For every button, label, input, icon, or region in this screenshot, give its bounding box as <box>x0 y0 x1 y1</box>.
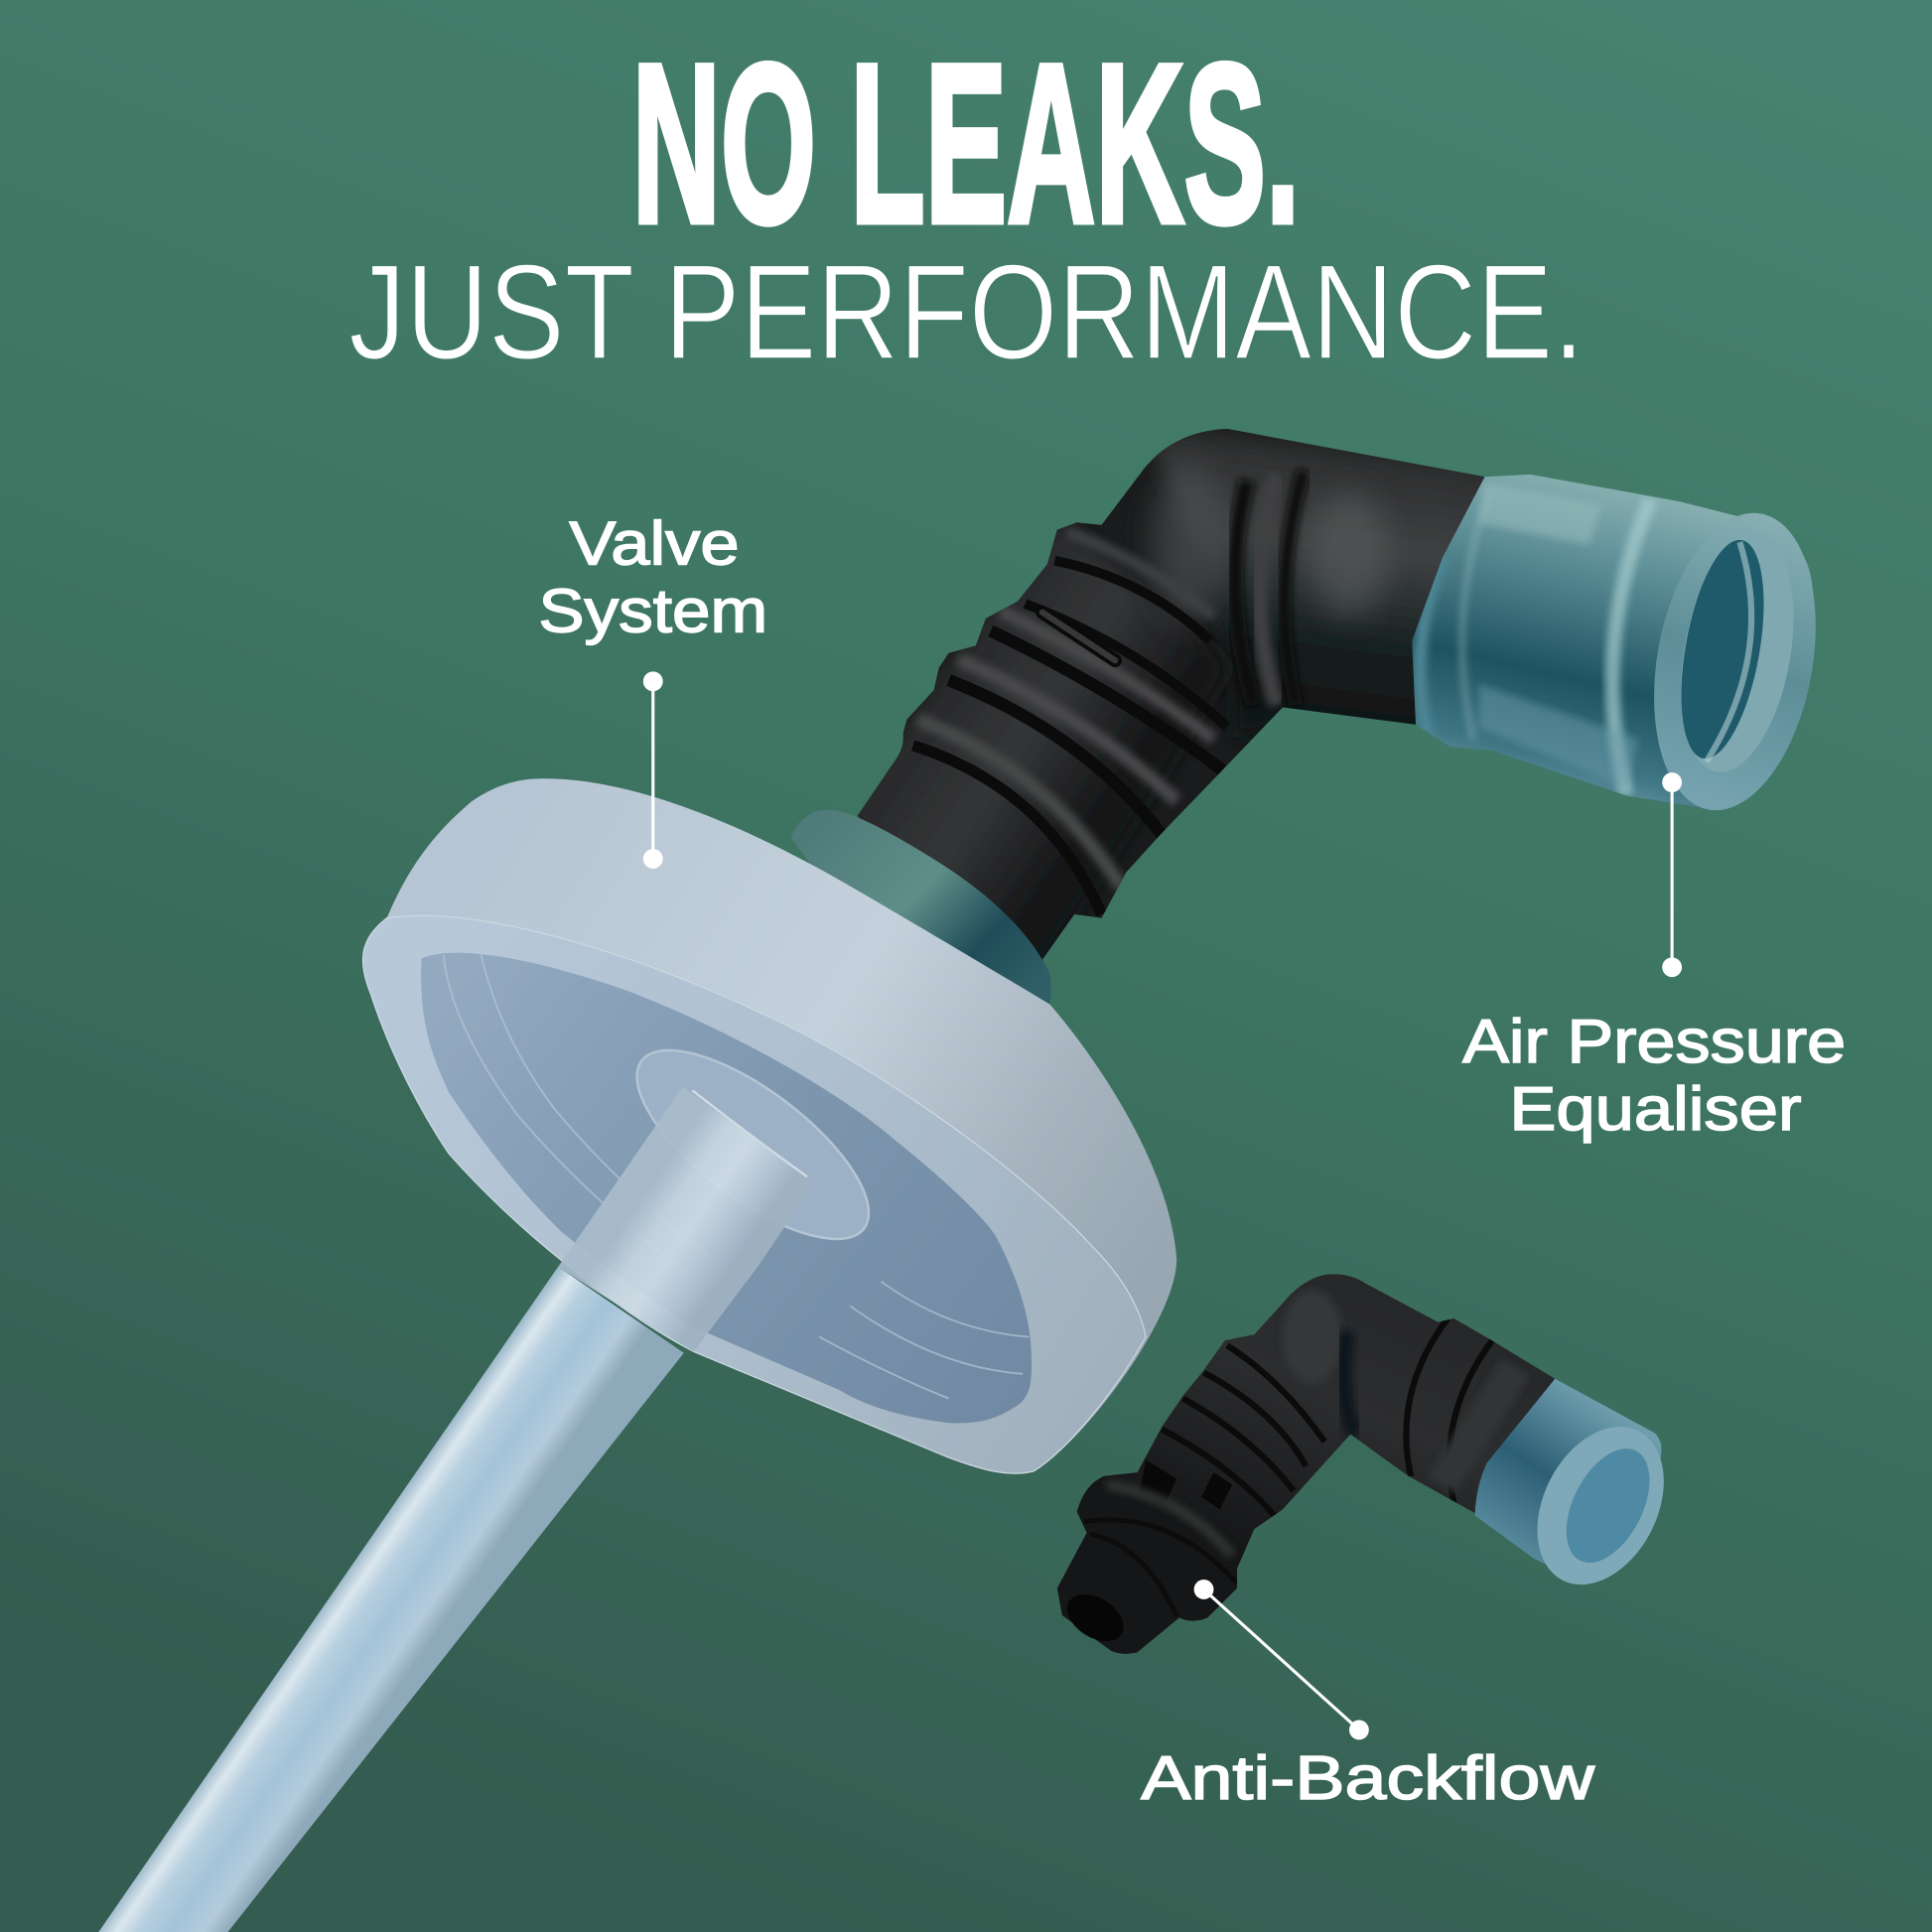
small ribs <box>1227 1345 1324 1442</box>
black elbow body <box>858 429 1485 960</box>
title <box>348 17 1585 387</box>
callout: valve system: Valve <box>569 509 740 578</box>
cap inner recess <box>421 953 1032 1423</box>
cap <box>362 778 1176 1473</box>
small transparent tip <box>1475 1379 1662 1579</box>
callout: valve system: System <box>538 578 767 646</box>
tube upper section <box>558 1087 814 1351</box>
callout: air pressure equaliser <box>1462 772 1846 1144</box>
small hole <box>1058 1585 1132 1651</box>
title: JUST PERFORMANCE. <box>348 235 1585 387</box>
transparent tip <box>1405 469 1824 819</box>
oval slot <box>1042 613 1115 660</box>
tube behind cap <box>98 1267 684 1932</box>
callout: valve system <box>538 509 767 869</box>
small black body <box>1047 1269 1565 1663</box>
cap outer side band <box>362 778 1176 1473</box>
inner thread lines <box>444 952 1029 1399</box>
callout: air pressure equaliser: Equaliser <box>1509 1075 1801 1144</box>
small elbow valve <box>1047 1269 1689 1663</box>
callout: anti-backflow: Anti-Backflow <box>1141 1744 1594 1813</box>
teal collar ring <box>791 809 1051 1029</box>
callout: anti-backflow <box>1141 1580 1594 1813</box>
callout: air pressure equaliser: Air Pressure <box>1462 1008 1846 1076</box>
hub <box>609 1018 897 1272</box>
large elbow valve <box>858 429 1816 960</box>
valve opening <box>1632 500 1838 823</box>
title: NO LEAKS. <box>632 17 1300 270</box>
cap front rim <box>362 915 1146 1473</box>
grooves and ribs <box>913 746 1102 914</box>
